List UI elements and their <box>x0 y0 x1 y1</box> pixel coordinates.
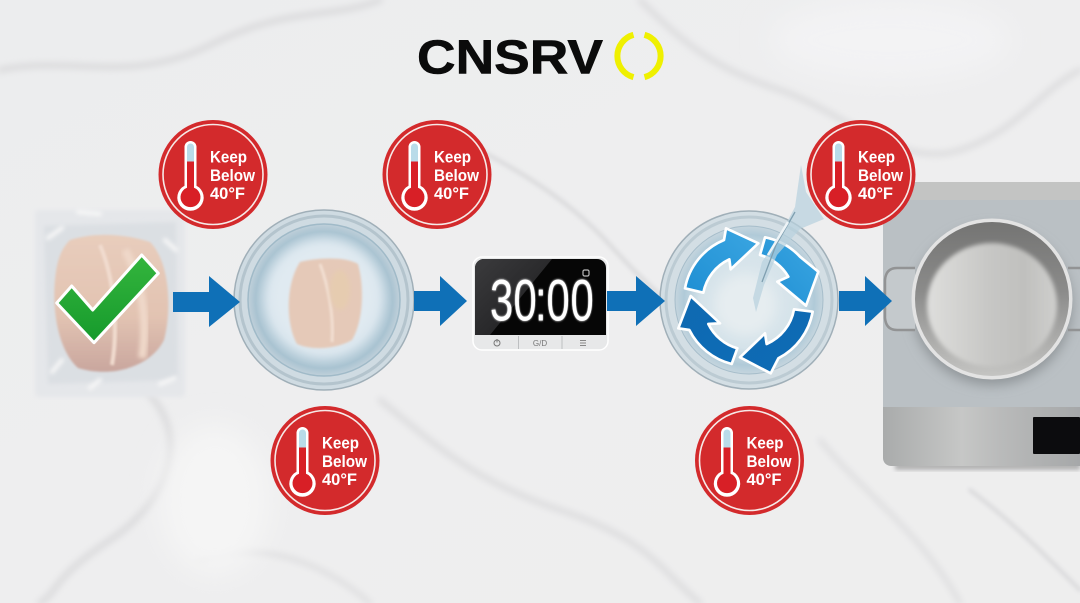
badge text: Keep <box>746 434 784 452</box>
timer buttons: G/D <box>533 339 547 348</box>
icon: thermometer <box>177 141 204 211</box>
glass bowl <box>660 211 838 389</box>
icon: thermometer <box>825 141 852 211</box>
chicken in bag <box>289 258 362 348</box>
cooktop shadow <box>895 462 1080 470</box>
badge: keep below 40F, bottom right <box>695 406 804 515</box>
cooktop front panel <box>883 407 1080 466</box>
logo wordmark: CNSRV <box>417 32 603 84</box>
badge text: 40°F <box>434 184 469 203</box>
pot <box>885 218 1080 385</box>
badge: keep below 40F, top left <box>158 120 268 229</box>
step 2: bowl of cold water with chicken <box>234 210 414 390</box>
arrow 4 <box>839 276 892 326</box>
badge text: Keep <box>210 148 247 166</box>
badge text: Below <box>746 452 792 471</box>
icon: thermometer <box>401 141 428 211</box>
arrow bottom right <box>740 309 813 373</box>
badge text: Below <box>210 166 256 185</box>
badge text: 40°F <box>210 184 245 203</box>
badge text: Below <box>322 452 368 471</box>
arrow 1 <box>173 276 240 327</box>
pot base <box>927 243 1057 367</box>
icon: green check mark <box>57 255 158 343</box>
badge text: 40°F <box>858 184 893 203</box>
step 3: digital timer <box>473 257 608 350</box>
vacuum bag <box>35 210 185 397</box>
arrow top left <box>685 228 758 293</box>
cooktop surface <box>883 200 1080 407</box>
timer screen reflection <box>475 259 552 335</box>
arrow bottom left <box>678 296 737 364</box>
pot wall <box>915 222 1069 376</box>
badge text: Keep <box>434 148 471 166</box>
timer readout: 30:00 <box>490 268 594 333</box>
badge text: Keep <box>322 434 359 452</box>
pot shadow <box>912 227 1072 385</box>
badge text: Below <box>858 166 904 185</box>
arrow 2 <box>414 276 467 326</box>
badge text: 40°F <box>322 470 357 489</box>
badge: keep below 40F, top second <box>382 120 492 229</box>
badge text: Below <box>434 166 480 185</box>
pot handles <box>885 268 915 330</box>
step 1: vacuum sealed chicken <box>35 210 185 397</box>
arrow top right <box>760 237 818 306</box>
pouring water <box>753 165 824 312</box>
cooktop back strip <box>905 182 1080 200</box>
timer body <box>473 257 608 350</box>
cooktop display <box>1033 417 1080 454</box>
timer screen <box>475 259 606 335</box>
timer status icon <box>583 270 589 276</box>
badge text: Keep <box>858 148 895 166</box>
chicken <box>54 235 168 372</box>
circulation arrows <box>678 228 818 373</box>
arrow 3 <box>607 276 665 326</box>
badge: keep below 40F, bottom left <box>270 406 380 515</box>
badge text: 40°F <box>746 470 782 489</box>
step 4: bowl with circulating water <box>660 165 838 389</box>
badge: keep below 40F, top right <box>806 120 916 229</box>
icon: thermometer <box>714 427 740 497</box>
icon: thermometer <box>289 427 316 497</box>
step 5: induction cooktop with pot <box>883 182 1080 470</box>
glass bowl <box>234 210 414 390</box>
pot rim <box>912 218 1072 380</box>
logo <box>417 32 661 84</box>
logo ring icon <box>617 35 661 77</box>
